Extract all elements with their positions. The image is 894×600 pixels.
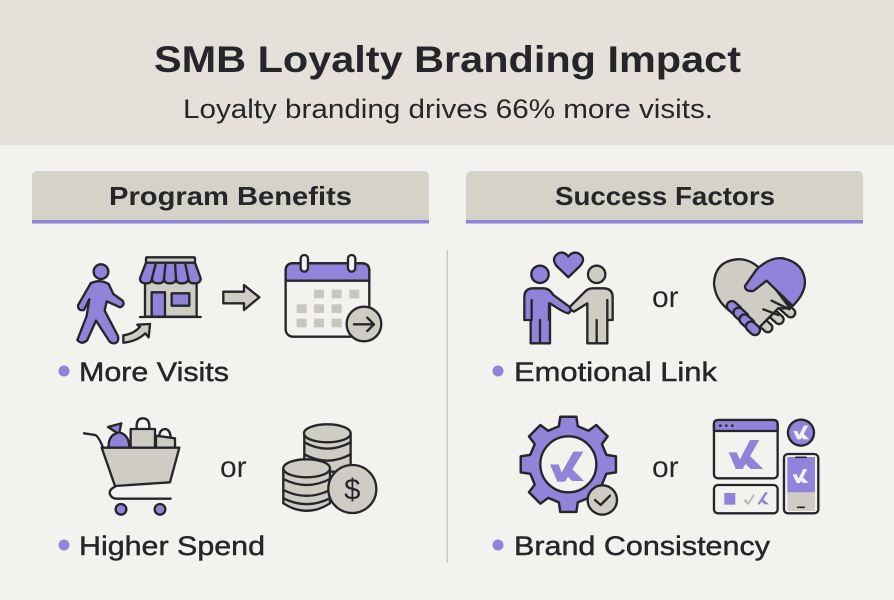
panel heading: Program Benefits: [32, 171, 429, 224]
icon: calendar with arrow: [286, 255, 381, 341]
icon: shopping cart: [84, 418, 179, 515]
icon: gear with brand mark: [521, 417, 617, 515]
header band: [0, 0, 894, 145]
icon: brand across devices: [714, 420, 818, 513]
icon: heart handshake: [714, 258, 805, 337]
label: Emotional Link: Emotional Link: [514, 357, 718, 387]
icon: two people with heart: [524, 253, 613, 343]
panel heading: Program Benefits: Program Benefits: [109, 181, 352, 211]
subtitle: Loyalty branding drives 66% more visits.: [183, 94, 713, 124]
icon: coin stacks with dollar: $: [344, 474, 360, 507]
icon: coin stacks with dollar: [283, 424, 376, 513]
panel heading: Success Factors: [466, 171, 863, 224]
label: Higher Spend: Higher Spend: [79, 531, 265, 561]
label: Brand Consistency: Brand Consistency: [514, 531, 771, 561]
icon: person walking to store: [77, 257, 201, 343]
arrow: [223, 285, 259, 310]
text: or: or: [652, 451, 679, 484]
title: SMB Loyalty Branding Impact: [154, 39, 741, 80]
text: or: or: [220, 451, 247, 484]
text: or: or: [652, 281, 679, 314]
label: More Visits: More Visits: [79, 357, 229, 387]
panel heading: Success Factors: Success Factors: [555, 181, 775, 211]
